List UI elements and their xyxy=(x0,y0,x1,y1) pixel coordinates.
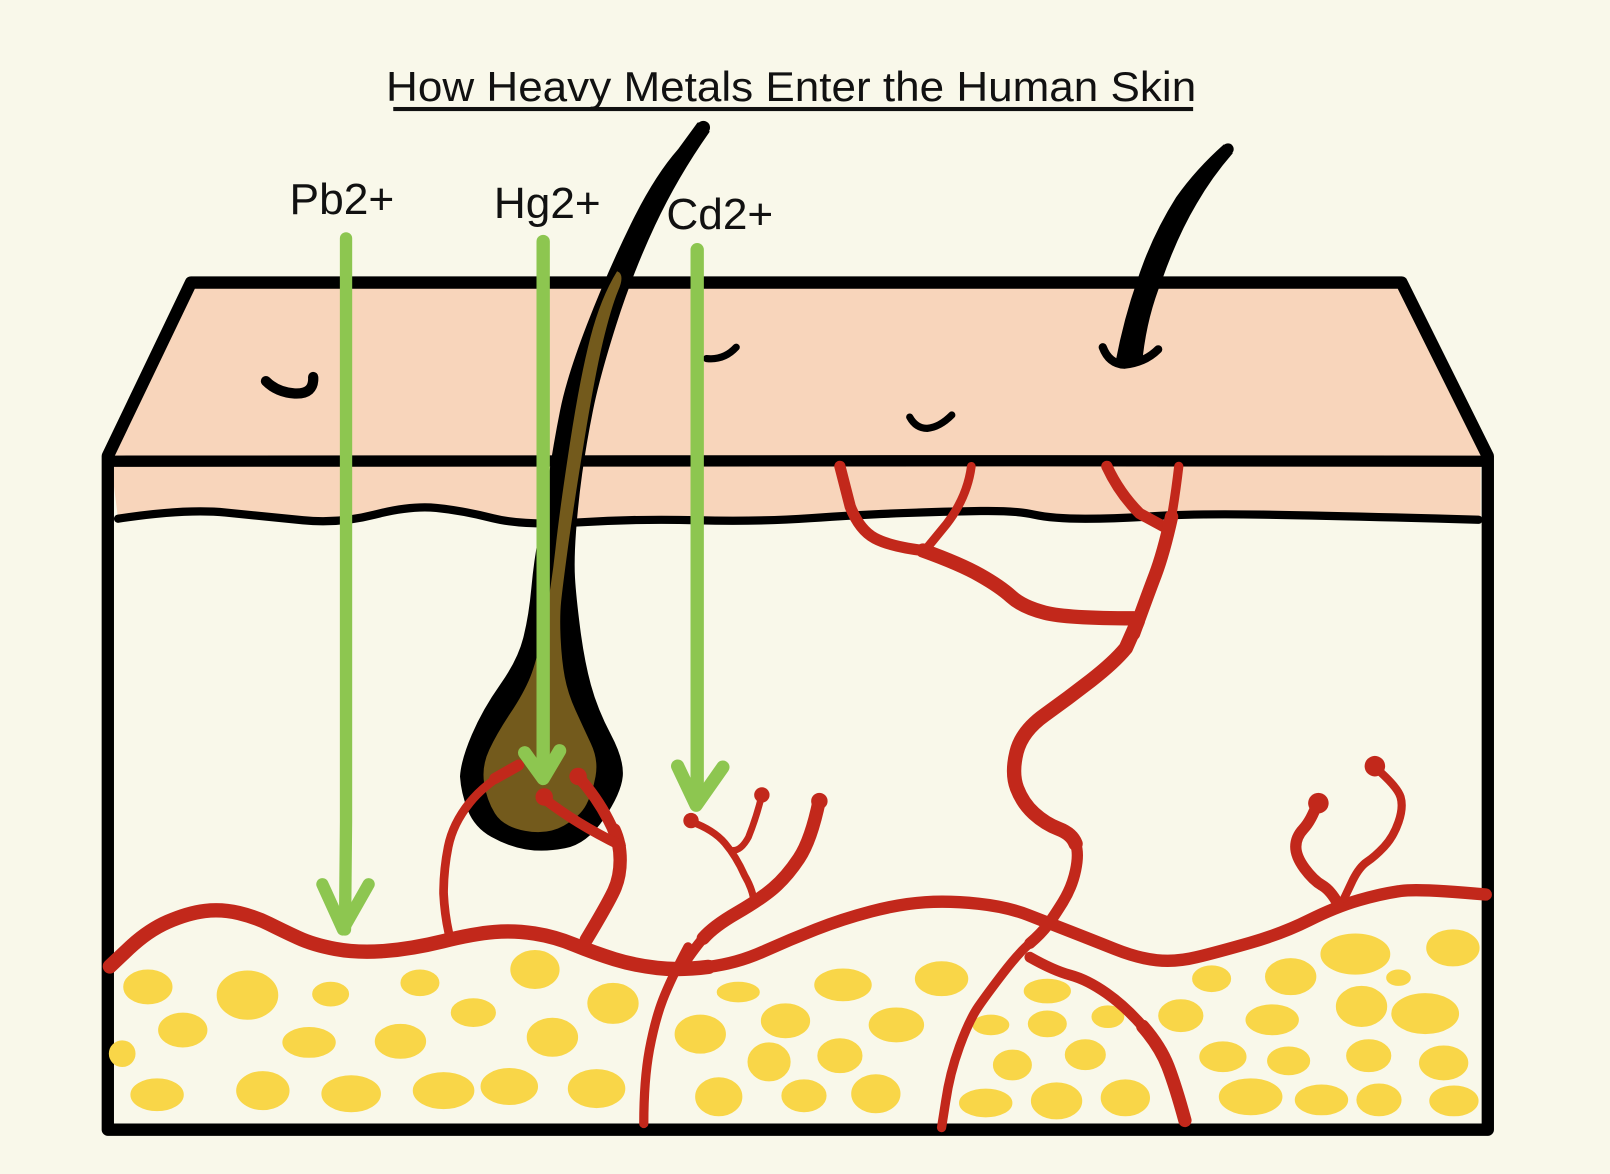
arrow: Cd2+ xyxy=(678,250,723,805)
panel: skin block outline xyxy=(108,283,1488,1130)
hair follicle with left hair xyxy=(461,121,710,850)
arrow: Pb2+ xyxy=(322,238,369,929)
label: Pb2+: Pb2+ xyxy=(290,176,394,224)
icon: skin pores xyxy=(266,347,952,428)
blood vessels xyxy=(110,466,1486,1128)
title: How Heavy Metals Enter the Human Skin xyxy=(386,63,1196,110)
panel: skin epidermis xyxy=(109,282,1485,523)
fat cells layer xyxy=(110,930,1479,1118)
right hair xyxy=(1103,143,1234,365)
arrow: Hg2+ xyxy=(525,241,560,778)
label: Hg2+: Hg2+ xyxy=(494,180,601,228)
label: Cd2+: Cd2+ xyxy=(666,191,773,239)
